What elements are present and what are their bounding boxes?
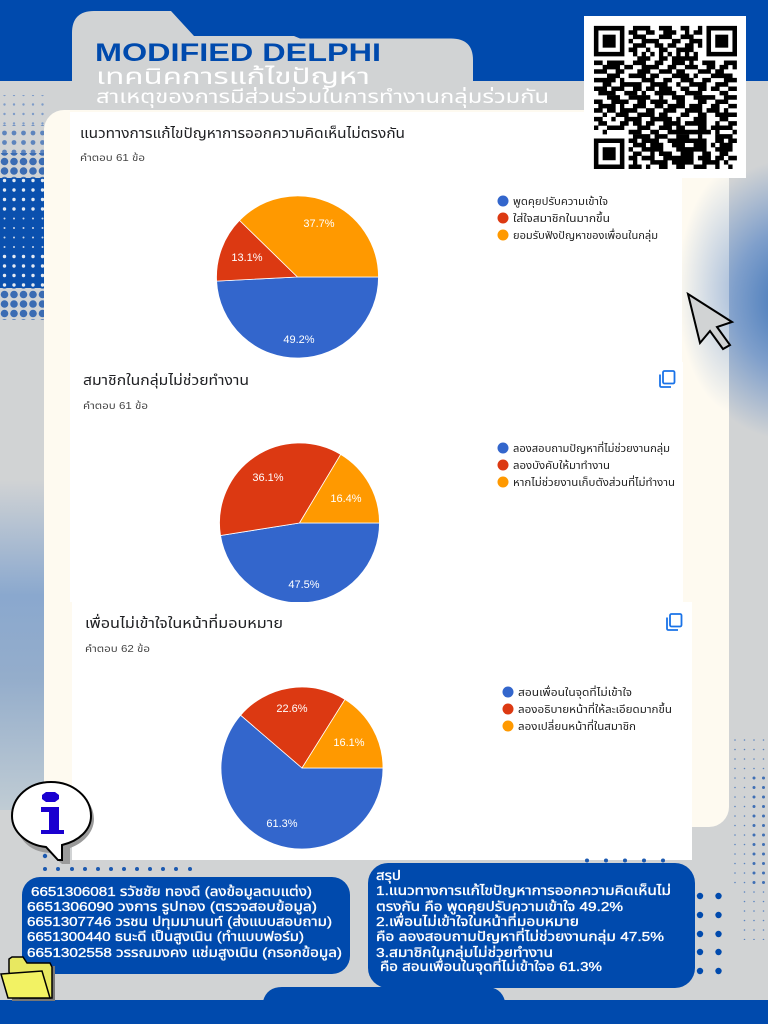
halftone dots left: [0, 95, 44, 320]
legend chart 3: ลองเปลี่ยนหน้าที่ในสมาชิก: [518, 719, 636, 733]
panel: summary: คือ สอนเพื่อนในจุดที่ไม่เข้าใจอ 61.3%: [380, 957, 603, 974]
panel: summary: คือ ลองสอบถามปัญหาที่ไม่ช่วยงานกลุ่ม 47.5%: [376, 927, 665, 944]
pie chart 1: 13.1%: [231, 252, 263, 264]
pie chart 2: 36.1%: [252, 472, 284, 484]
bottom center tab: [263, 987, 505, 1001]
icon: yellow folder: [1, 957, 55, 1001]
subtitle: technique: เทคนิคการแก้ไขปัญหา: [96, 64, 370, 89]
panel: summary: ตรงกัน คือ พูดคุยปรับความเข้าใจ 49.2%: [376, 899, 624, 914]
pie chart 3: [221, 687, 383, 849]
pie chart 2: [220, 443, 380, 603]
cream main panel: [44, 110, 729, 827]
pie chart 3: 16.1%: [333, 737, 365, 749]
folder tab header shape: [72, 11, 473, 81]
title: MODIFIED DELPHI: MODIFIED DELPHI: [95, 39, 381, 67]
panel: summary: 3.สมาชิกในกลุ่มไม่ช่วยทำงาน: [376, 945, 553, 960]
panel: chart 3: [72, 602, 692, 860]
legend chart 1: พูดคุยปรับความเข้าใจ: [513, 196, 608, 208]
panel: team members: 6651300440 ธนะดี เป็นสูงเนิน (ทำแบบฟอร์ม): [27, 929, 304, 944]
pie chart 1: [216, 196, 379, 358]
legend chart 3: [502, 685, 672, 733]
dots under chart: [43, 854, 665, 871]
legend chart 2: ลองบังคับให้มาทำงาน: [513, 460, 610, 472]
icon: cursor arrow: [688, 294, 732, 349]
chart 3 title: เพื่อนไม่เข้าใจในหน้าที่มอบหมาย: [85, 613, 283, 631]
legend chart 3: สอนเพื่อนในจุดที่ไม่เข้าใจ: [518, 685, 632, 699]
panel: summary: 2.เพื่อนไม่เข้าใจในหน้าที่มอบหมาย: [376, 912, 579, 929]
panel: chart 2: [70, 362, 683, 603]
panel: team members: [22, 877, 350, 974]
panel: chart 1: [70, 112, 682, 362]
legend chart 1: ใส่ใจสมาชิกในมากขึ้น: [513, 211, 610, 225]
chart 2 response count: คำตอบ 61 ข้อ: [83, 400, 148, 412]
legend chart 3: ลองอธิบายหน้าที่ให้ละเอียดมากขึ้น: [518, 702, 672, 716]
chart 1 response count: คำตอบ 61 ข้อ: [80, 152, 145, 164]
pie chart 3: 22.6%: [276, 703, 308, 715]
legend chart 2: หากไม่ช่วยงานเก็บตังส่วนที่ไม่ทำงาน: [513, 475, 675, 489]
panel: team members: 6651307746 วรชน ปทุมมานนท์ (ส่งแบบสอบถาม): [27, 914, 332, 929]
icon: copy chart 3: [667, 614, 682, 630]
panel: summary: 1.แนวทางการแก้ไขปัญหาการออกความคิดเห็นไม่: [376, 883, 671, 898]
legend chart 2: [498, 441, 675, 489]
pie chart 3: 61.3%: [266, 818, 298, 830]
QR code: [584, 16, 746, 178]
subtitle: causes: สาเหตุของการมีส่วนร่วมในการทำงานกลุ่มร่วมกัน: [96, 85, 549, 108]
panel: team members: 6651306081 รวัชชัย ทองดี (ลงข้อมูลตบแต่ง): [31, 884, 312, 899]
legend chart 1: ยอมรับฟังปัญหาของเพื่อนในกลุ่ม: [513, 228, 658, 242]
dots right of summary: [697, 893, 722, 974]
legend chart 2: ลองสอบถามปัญหาที่ไม่ช่วยงานกลุ่ม: [513, 441, 670, 455]
legend chart 1: [498, 196, 658, 242]
panel: summary: สรุป: [376, 868, 401, 883]
pie chart 2: 16.4%: [330, 493, 362, 505]
panel: team members: 6651306090 วงการ รูปทอง (ตรวจสอบข้อมูล): [27, 899, 317, 914]
chart 3 response count: คำตอบ 62 ข้อ: [85, 643, 150, 655]
pie chart 1: 37.7%: [303, 218, 335, 230]
panel: summary: [368, 863, 695, 988]
icon: copy chart 2: [660, 371, 674, 387]
chart 2 title: สมาชิกในกลุ่มไม่ช่วยทำงาน: [83, 372, 249, 389]
pie chart 2: 47.5%: [288, 579, 320, 591]
icon: info speech bubble: [12, 782, 94, 864]
panel: team members: 6651302558 วรรณมงคง แช่มสูงเนิน (กรอกข้อมูล): [27, 945, 342, 960]
pie chart 1: 49.2%: [283, 334, 315, 346]
chart 1 title: แนวทางการแก้ไขปัญหาการออกความคิดเห็นไม่ตรงกัน: [80, 125, 405, 141]
halftone dots right: [730, 735, 768, 940]
